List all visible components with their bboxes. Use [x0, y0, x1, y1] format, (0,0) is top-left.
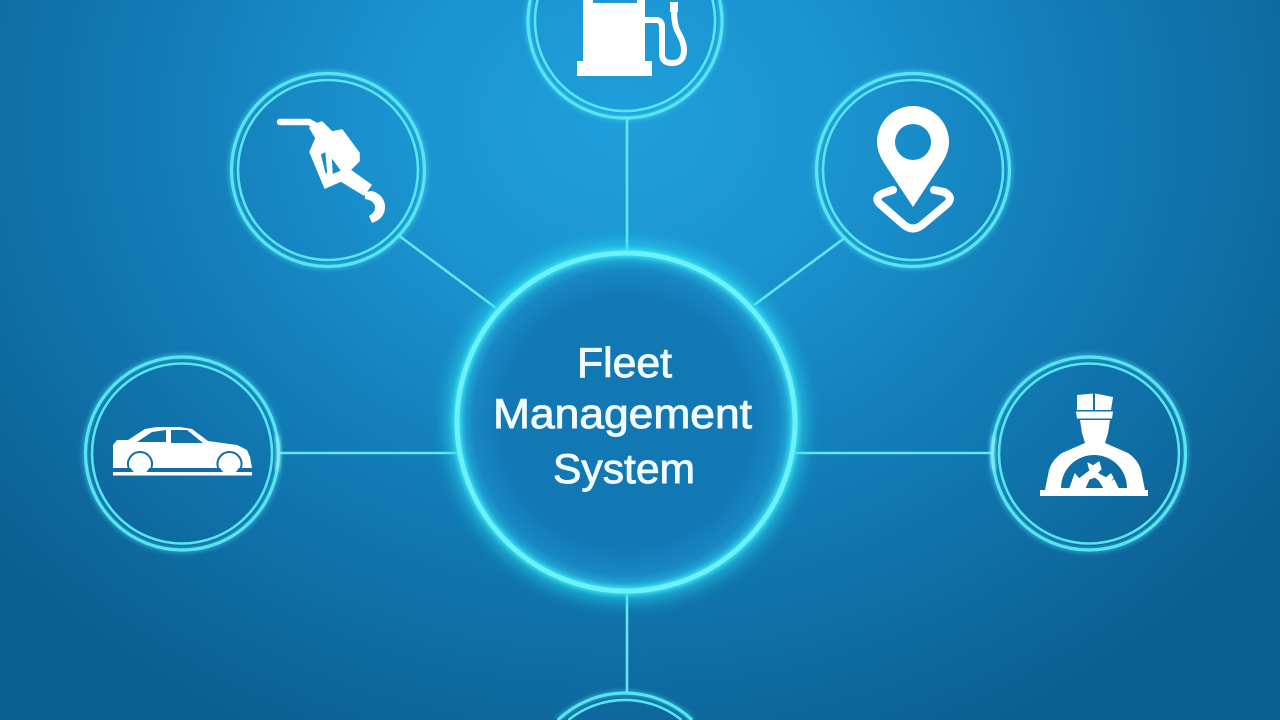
connector: left [279, 452, 458, 454]
hub title [493, 339, 752, 492]
hub title: Fleet [577, 339, 672, 386]
icon: location pin [877, 106, 950, 228]
node: car (left) [85, 356, 279, 550]
icon: fuel pump [577, 0, 684, 76]
connector: top [626, 118, 628, 252]
connector: upper left [398, 235, 496, 308]
icon: fuel nozzle [280, 122, 385, 223]
node: driver and service (right) [992, 356, 1186, 550]
node: bottom (cropped) [558, 693, 692, 720]
connector: bottom [626, 592, 628, 694]
node: fuel nozzle (upper left) [231, 73, 425, 267]
connector: right [795, 452, 992, 454]
connector lines [279, 118, 992, 694]
hub title: Management [493, 390, 752, 437]
central hub: Fleet Management System [456, 252, 796, 592]
node: fuel pump (top) [528, 0, 722, 118]
node: location pin (upper right) [816, 73, 1010, 267]
hub title: System [553, 445, 695, 492]
icon: car [113, 427, 252, 476]
icon: driver with gauge [1040, 394, 1148, 496]
connector: upper right [754, 237, 846, 305]
